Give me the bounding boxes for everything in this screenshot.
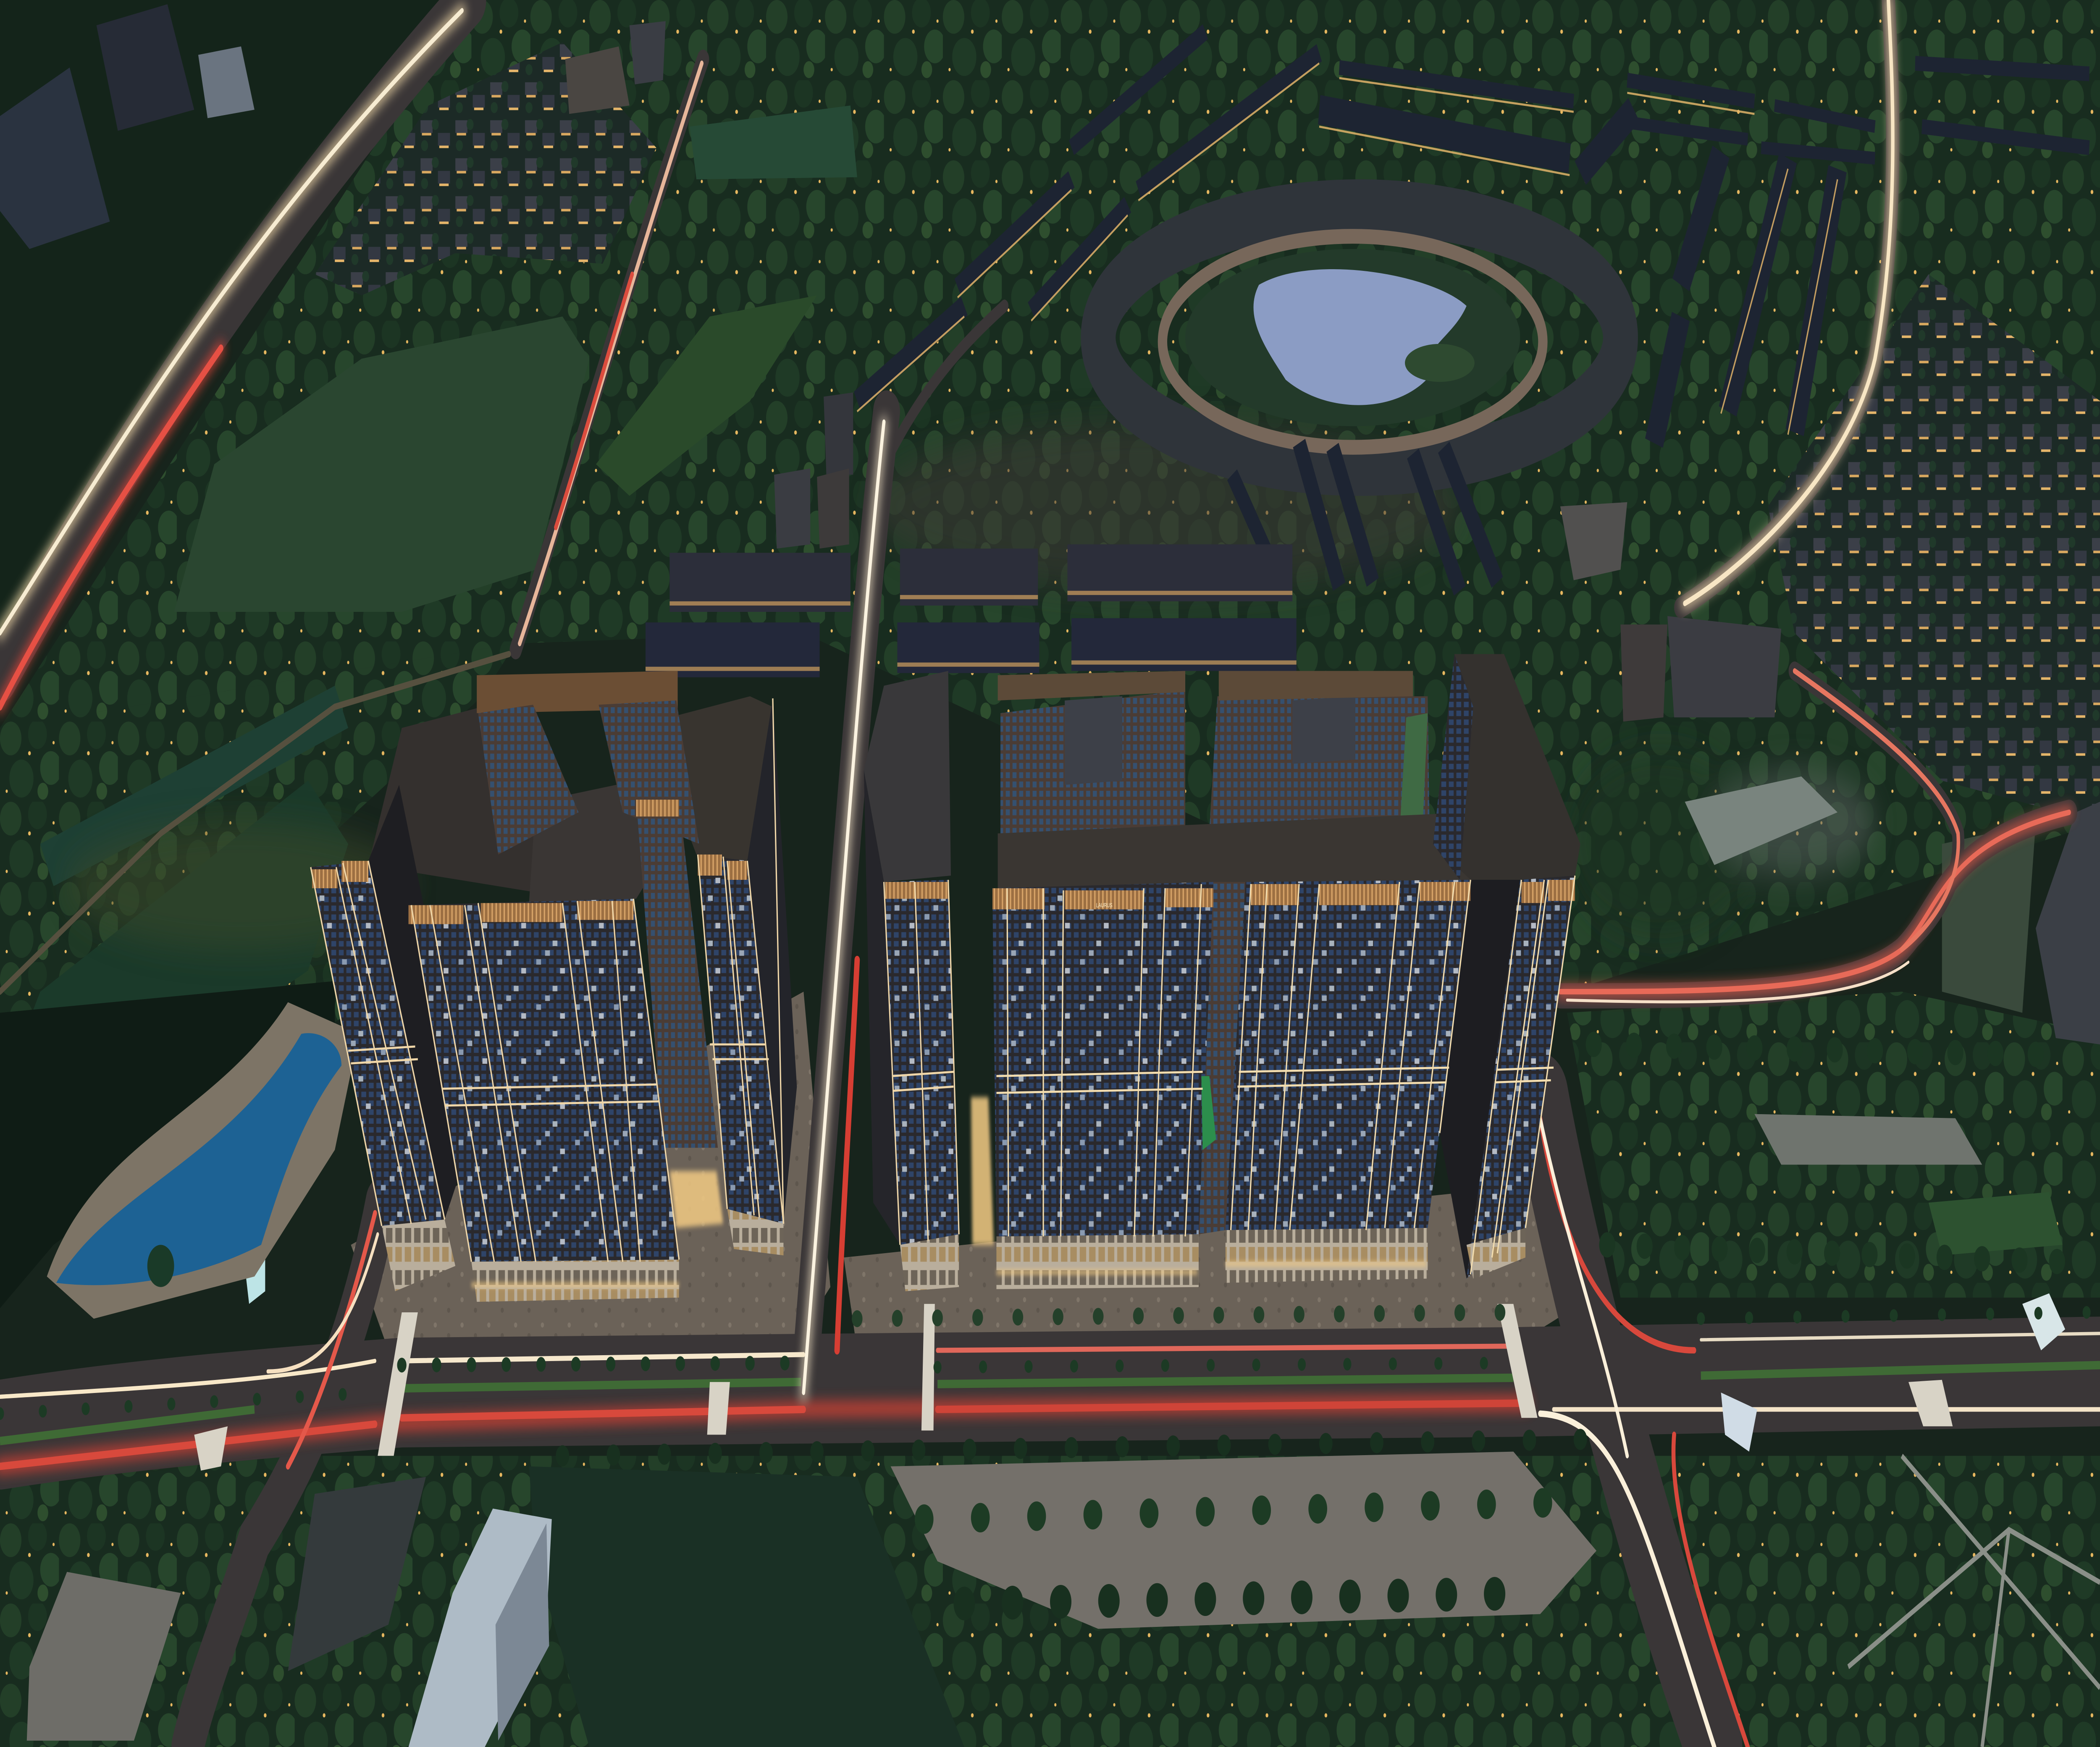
tower B <box>97 4 194 131</box>
top-left forest <box>0 0 469 654</box>
house rows upper-left <box>315 42 656 295</box>
crowns <box>312 800 747 924</box>
main block front <box>411 899 679 1262</box>
bottom plaza <box>891 1452 1596 1629</box>
woodland between the highway and the avenue <box>0 0 750 728</box>
lagoon water <box>56 1033 341 1285</box>
footbridge left <box>378 1312 418 1456</box>
rear block A parapet <box>998 671 1185 700</box>
right park <box>1567 992 2100 1298</box>
billboard two <box>1721 1393 1757 1452</box>
retail strip left <box>471 1283 679 1287</box>
right tower lit windows <box>698 855 783 1224</box>
distant towers top-left <box>0 4 2100 1044</box>
lawn pond top <box>690 105 857 179</box>
park paths bottom-right <box>1848 1456 2100 1747</box>
rear block B green stair <box>1399 713 1428 834</box>
middle rear wing <box>636 800 718 1148</box>
rear block right <box>598 700 699 844</box>
rear right tower wall <box>1433 654 1473 880</box>
left block front <box>992 882 1213 1236</box>
upper glow <box>871 422 1460 591</box>
lake <box>1254 269 1467 405</box>
left tower podium <box>382 1220 455 1291</box>
crossing left <box>194 1426 228 1471</box>
retail strip right <box>1226 1262 1426 1266</box>
left tower cluster <box>311 671 797 1302</box>
lower-left forest <box>0 981 335 1308</box>
courtyard glow <box>971 1097 994 1245</box>
terraced house rows <box>857 31 2089 595</box>
lawn avenue <box>596 295 817 496</box>
gap tower <box>1199 882 1246 1234</box>
warm haze <box>1567 749 1754 939</box>
left side <box>864 770 900 1245</box>
pedestrian crossings and bridges <box>194 1304 1953 1471</box>
row 5 <box>1067 544 1292 601</box>
row lights <box>646 591 1297 671</box>
small building <box>1560 502 1627 580</box>
roof <box>864 671 951 882</box>
retail strip centre <box>996 1270 1197 1275</box>
left woodland <box>0 643 516 1266</box>
billboard one <box>2022 1293 2065 1350</box>
rear block A <box>1000 690 1185 897</box>
rear block B roof <box>1292 696 1355 764</box>
low block <box>1685 776 1838 865</box>
upper neighbourhood foliage <box>516 0 2100 992</box>
bottom white building <box>409 1508 552 1747</box>
right tower podium <box>727 1209 783 1255</box>
courtyard lawn <box>1201 1076 1216 1150</box>
rear block A roof <box>1065 696 1122 785</box>
footbridge centre <box>921 1304 935 1430</box>
median strips <box>0 1365 2100 1441</box>
front <box>884 880 959 1245</box>
facade light lines <box>996 876 1575 1275</box>
ring road <box>1163 236 1543 447</box>
corner tower block third <box>817 468 849 548</box>
right tower cluster <box>992 654 1580 1289</box>
residential right <box>1768 274 2100 823</box>
roof <box>409 1508 552 1747</box>
tower A <box>0 68 110 249</box>
bottom forest band <box>0 1456 2100 1747</box>
left glow <box>67 823 415 950</box>
small sign <box>244 1245 265 1304</box>
light lines <box>884 880 959 1245</box>
left block podium <box>996 1234 1199 1289</box>
school building <box>1620 624 1667 721</box>
middle roof <box>529 781 683 903</box>
right park lawns <box>1929 1192 2063 1255</box>
small island <box>1405 344 1475 382</box>
parking lot <box>288 1477 426 1671</box>
lit windows <box>884 880 959 1245</box>
right tower podium <box>1467 1228 1525 1279</box>
lagoon deck <box>47 1002 359 1319</box>
centre plaza <box>844 1182 1574 1350</box>
crowns <box>992 880 1575 909</box>
row 1 <box>669 553 850 612</box>
right tower side <box>747 698 797 1224</box>
pale plaza haze <box>1714 770 1875 876</box>
crossing centre <box>707 1382 730 1435</box>
bottom-left plaza <box>27 1572 181 1741</box>
left lower lawn <box>0 781 348 1182</box>
left plaza <box>351 992 830 1350</box>
left tower front <box>311 861 445 1226</box>
lawn upper-left <box>174 317 589 612</box>
brand sign left: LAURUS <box>1096 902 1113 909</box>
left block lit windows <box>992 882 1213 1236</box>
billboards <box>244 1245 2065 1452</box>
right tower lit windows <box>1467 876 1575 1279</box>
right tower front <box>698 855 783 1224</box>
villa row lights <box>857 63 1838 435</box>
rear block left <box>478 705 579 855</box>
school building two <box>1667 616 1781 717</box>
paved plazas around towers <box>27 992 1596 1741</box>
crown <box>885 882 948 899</box>
right-edge tower <box>2036 802 2100 1044</box>
ring of villas <box>1098 207 1620 468</box>
street tree rows <box>0 1044 2089 1603</box>
centre slim tower <box>864 671 959 1291</box>
crossing right <box>1908 1380 1953 1426</box>
tower E <box>630 21 666 84</box>
tower D <box>565 47 630 114</box>
lagoon trees <box>147 1245 174 1287</box>
clubhouse buildings right of towers <box>1560 502 1838 865</box>
row 4 <box>897 622 1039 673</box>
rear amber parapet <box>477 671 678 713</box>
amenity garden glow <box>669 1171 723 1228</box>
pond banks <box>1185 249 1520 426</box>
rear roof <box>368 707 589 897</box>
corner tower block <box>824 392 853 475</box>
right tower front <box>1467 876 1575 1279</box>
left tower side <box>368 785 471 1220</box>
pond district <box>1098 207 1620 468</box>
facade light lines <box>311 698 783 1262</box>
corner tower block lower <box>774 468 810 548</box>
right tower side <box>1440 880 1520 1279</box>
right park pavement <box>1754 1114 1982 1165</box>
row 2 <box>646 622 820 677</box>
corner lawn far right <box>1942 823 2036 1013</box>
side wall <box>496 1523 549 1741</box>
row 3 <box>900 548 1038 606</box>
roof strip <box>998 812 1473 897</box>
rear right tower <box>1433 654 1580 880</box>
right-side roof <box>669 696 773 861</box>
tower C <box>198 47 255 118</box>
left tower lit windows <box>311 861 445 1226</box>
left green water <box>40 686 348 886</box>
main block podium <box>471 1259 679 1302</box>
podium lights <box>471 1097 1426 1287</box>
rear block B parapet <box>1219 671 1413 700</box>
footbridge right <box>1497 1304 1538 1418</box>
right block lit windows <box>1226 880 1470 1230</box>
mansion rows above the towers <box>646 392 1297 677</box>
soft tone blur over the land <box>67 422 1875 950</box>
swimming lagoon <box>47 1002 359 1319</box>
bottom dark water <box>529 1466 964 1747</box>
row 6 <box>1071 618 1297 671</box>
right block podium <box>1226 1228 1428 1283</box>
right block front <box>1226 880 1470 1230</box>
rear block B <box>1205 696 1431 897</box>
podium <box>900 1234 959 1291</box>
main block lit windows <box>411 899 679 1262</box>
